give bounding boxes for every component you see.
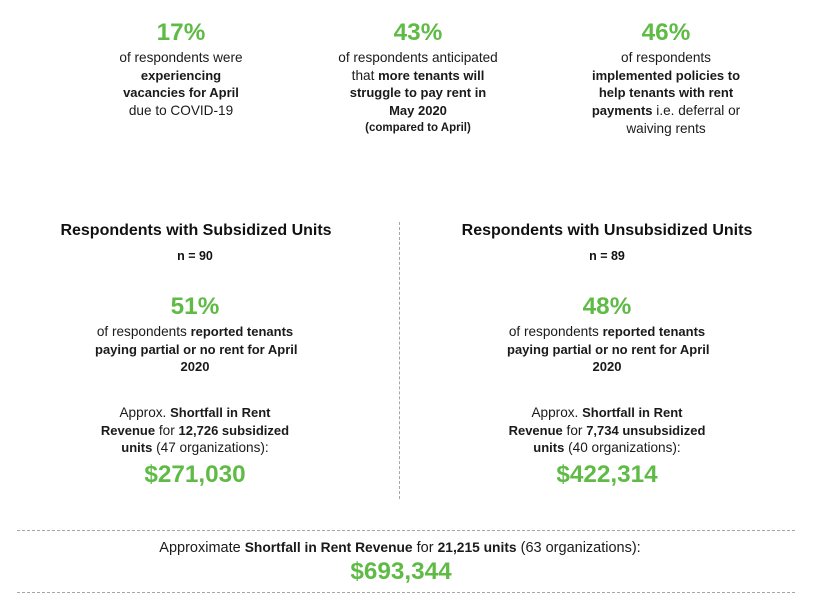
text: subsidized shortfall (101, 405, 289, 455)
text: policies description: help tenants with rent (599, 85, 733, 100)
stat: $271,030: $271,030 (144, 461, 246, 488)
text: unsubsidized shortfall: units (40 organizations): (533, 440, 681, 455)
text: vacancies description: due to COVID-19 (129, 103, 233, 118)
text: anticipated description: May 2020 (389, 103, 447, 118)
heading: subsidized units: Respondents with Subsidized Units (60, 222, 332, 239)
stat: $693,344: $693,344 (350, 558, 452, 585)
text: vacancies description (119, 50, 243, 118)
text: subsidized partial rent: 2020 (181, 359, 209, 374)
sample size: subsidized: n = 90 (177, 249, 213, 263)
text: subsidized partial rent: paying partial or no rent for April (95, 342, 297, 357)
stat: 51% subsidized: 51% (171, 293, 219, 320)
text: policies description: of respondents (621, 50, 711, 65)
text: unsubsidized shortfall (509, 405, 705, 455)
text: vacancies description: vacancies for April (123, 85, 239, 100)
text: anticipated description: of respondents anticipated (338, 50, 498, 65)
heading: unsubsidized units: Respondents with Unsubsidized Units (462, 222, 752, 239)
text: unsubsidized partial rent (507, 324, 709, 374)
text: subsidized partial rent: of respondents reported tenants (97, 324, 293, 339)
text: unsubsidized shortfall: Approx. Shortfall in Rent (531, 405, 682, 420)
divider: vertical dashed (399, 222, 400, 499)
text: unsubsidized partial rent: paying partial or no rent for April (507, 342, 709, 357)
text: total shortfall: Approximate Shortfall in Rent Revenue for 21,215 units (63 organizations): (159, 540, 641, 556)
text: unsubsidized partial rent: 2020 (593, 359, 621, 374)
text: vacancies description: of respondents were (119, 50, 243, 65)
stat: 43% anticipated: 43% (394, 19, 442, 46)
stat: 17% vacancies: 17% (157, 19, 205, 46)
stat: 48% unsubsidized: 48% (583, 293, 631, 320)
text: unsubsidized partial rent: of respondents reported tenants (509, 324, 705, 339)
text: subsidized partial rent (95, 324, 297, 374)
text: subsidized shortfall: units (47 organizations): (121, 440, 269, 455)
text: anticipated description: struggle to pay rent in (350, 85, 486, 100)
divider: top dashed (17, 530, 795, 531)
text: policies description (592, 50, 740, 136)
text: subsidized shortfall: Revenue for 12,726 subsidized (101, 423, 289, 438)
text: anticipated description: (compared to April) (365, 122, 471, 134)
text: vacancies description: experiencing (141, 68, 221, 83)
text: anticipated description (338, 50, 498, 134)
text: subsidized shortfall: Approx. Shortfall in Rent (119, 405, 270, 420)
divider: bottom dashed (17, 592, 795, 593)
text: policies description: payments i.e. deferral or (592, 103, 740, 118)
text: unsubsidized shortfall: Revenue for 7,734 unsubsidized (509, 423, 705, 438)
stat: $422,314: $422,314 (556, 461, 658, 488)
text: policies description: waiving rents (626, 121, 706, 136)
text: anticipated description: that more tenants will (352, 68, 484, 83)
sample size: unsubsidized: n = 89 (589, 249, 625, 263)
stat: 46% policies: 46% (642, 19, 690, 46)
text: policies description: implemented policies to (592, 68, 740, 83)
